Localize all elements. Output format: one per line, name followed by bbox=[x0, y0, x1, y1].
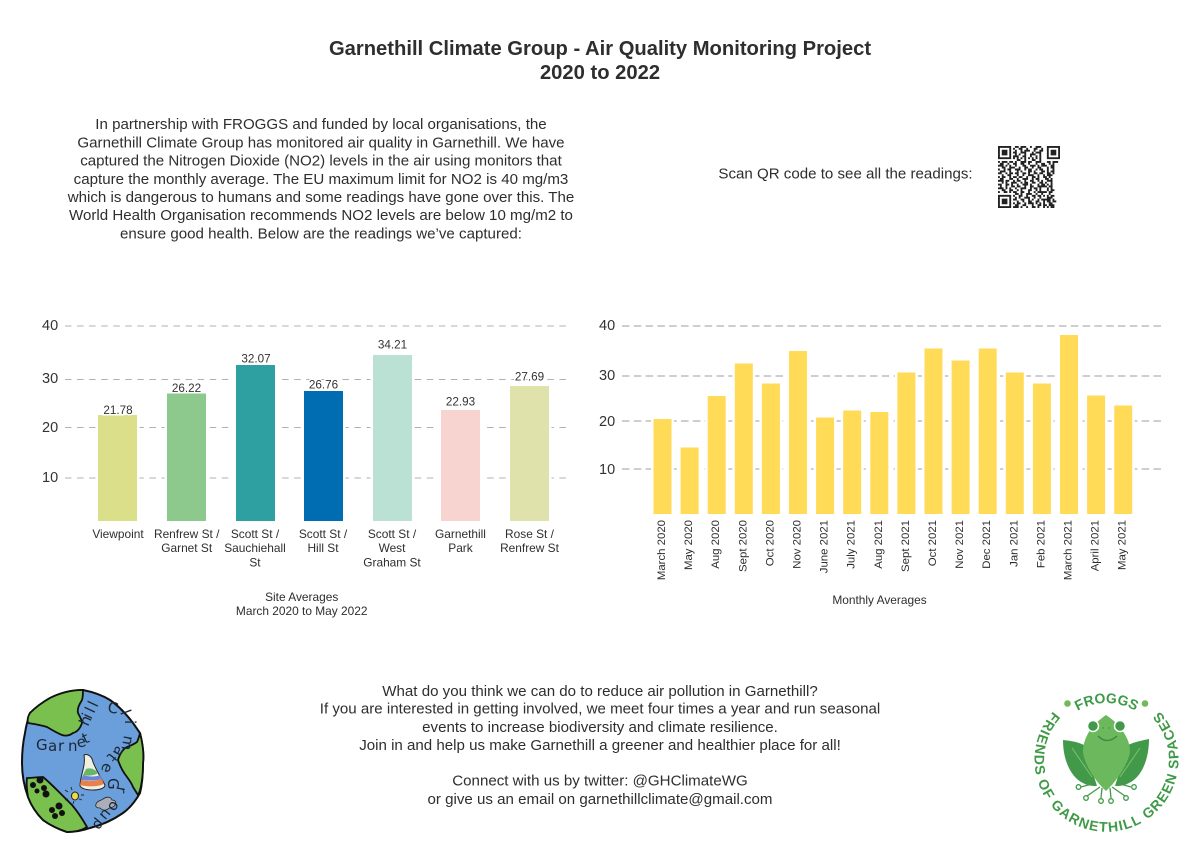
handwritten logo lettering bbox=[36, 698, 139, 834]
month labels: Sept 2021 bbox=[900, 520, 912, 572]
category labels: sites: Garnethill bbox=[435, 527, 486, 541]
QR code prompt: Scan QR code to see all the readings: bbox=[718, 166, 973, 182]
category labels: sites: Hill St bbox=[307, 541, 339, 555]
category labels: sites: Scott St / bbox=[231, 527, 280, 541]
bar values: site averages: 21.78 bbox=[103, 404, 133, 417]
category labels: sites: Renfrew St / bbox=[154, 527, 220, 541]
circular lettering: friends of garnethill green spaces: FRIENDS OF GARNETHILL GREEN SPACES bbox=[1034, 712, 1179, 832]
logo: Garnethill Climate Group globe bbox=[22, 690, 143, 834]
call to action text block: Join in and help us make Garnethill a greener and healthier place for all! bbox=[359, 737, 841, 754]
chart caption: monthly averages: Monthly Averages bbox=[832, 593, 927, 607]
category labels: sites: Sauchiehall bbox=[224, 541, 286, 555]
y axis labels: monthly averages: 30 bbox=[599, 368, 615, 384]
month labels: July 2021 bbox=[846, 520, 858, 569]
intro text block: ensure good health. Below are the readings we’ve captured: bbox=[120, 226, 522, 242]
category labels: sites bbox=[92, 527, 560, 570]
y axis labels: site averages: 10 bbox=[42, 470, 58, 486]
bar values: site averages: 27.69 bbox=[515, 370, 544, 384]
bar values: site averages: 26.22 bbox=[172, 382, 201, 395]
category labels: sites: Graham St bbox=[363, 556, 421, 570]
bar values: site averages: 22.93 bbox=[446, 396, 475, 408]
month labels bbox=[656, 520, 1129, 580]
category labels: sites: West bbox=[379, 541, 406, 555]
handwritten logo lettering: ClimateGroup bbox=[89, 698, 139, 834]
chart caption: site averages: Site Averages bbox=[265, 590, 338, 604]
call to action text block bbox=[320, 683, 880, 808]
frog bbox=[1063, 715, 1149, 803]
y axis labels: site averages: 30 bbox=[42, 371, 58, 387]
call to action text block: or give us an email on garnethillclimate@gmail.com bbox=[427, 791, 773, 808]
bar values: site averages: 34.21 bbox=[378, 338, 407, 352]
bars: monthly averages bbox=[654, 335, 1132, 514]
month labels: April 2021 bbox=[1090, 520, 1102, 571]
category labels: sites: Viewpoint bbox=[92, 527, 144, 541]
month labels: Aug 2021 bbox=[873, 520, 885, 569]
month labels: Aug 2020 bbox=[710, 520, 722, 569]
y axis labels: monthly averages: 40 bbox=[599, 318, 615, 334]
trees bbox=[30, 776, 65, 819]
month labels: March 2020 bbox=[656, 520, 668, 580]
month labels: June 2021 bbox=[819, 520, 831, 573]
intro text block: captured the Nitrogen Dioxide (NO2) levels in the air using monitors that bbox=[80, 152, 563, 170]
intro text block: World Health Organisation recommends NO2 levels are below 10 mg/m2 to bbox=[69, 207, 573, 224]
category labels: sites: Rose St / bbox=[505, 527, 555, 541]
month labels: Sept 2020 bbox=[737, 520, 749, 572]
month labels: May 2021 bbox=[1117, 520, 1129, 570]
call to action text block: What do you think we can do to reduce air pollution in Garnethill? bbox=[382, 683, 818, 700]
chart caption: site averages: March 2020 to May 2022 bbox=[236, 604, 368, 618]
land: right bbox=[118, 733, 143, 795]
category labels: sites: St bbox=[249, 556, 261, 570]
month labels: Dec 2021 bbox=[981, 520, 993, 569]
bars: site averages bbox=[98, 355, 549, 521]
circular lettering: FROGGS: FROGGS bbox=[1074, 693, 1138, 710]
bar chart: monthly averages bbox=[599, 318, 1161, 607]
intro text block: Garnethill Climate Group has monitored air quality in Garnethill. We have bbox=[77, 134, 565, 152]
y axis labels: monthly averages: 10 bbox=[599, 462, 615, 478]
land: top left bbox=[28, 690, 83, 736]
y axis labels: site averages: 20 bbox=[42, 420, 58, 436]
title bbox=[329, 38, 871, 84]
bar values: site averages: 26.76 bbox=[309, 378, 338, 392]
call to action text block: Connect with us by twitter: @GHClimateWG bbox=[452, 772, 748, 790]
month labels: Oct 2021 bbox=[927, 520, 939, 566]
month labels: Nov 2020 bbox=[792, 520, 804, 569]
handwritten logo lettering: Garnethill bbox=[36, 698, 102, 755]
logo: FROGGS bbox=[1034, 693, 1179, 832]
category labels: sites: Scott St / bbox=[299, 527, 348, 541]
month labels: March 2021 bbox=[1062, 520, 1074, 580]
month labels: Nov 2021 bbox=[954, 520, 966, 569]
month labels: Feb 2021 bbox=[1035, 520, 1047, 568]
rainbow cone bbox=[80, 754, 105, 790]
intro text block: capture the monthly average. The EU maximum limit for NO2 is 40 mg/m3 bbox=[74, 171, 568, 188]
category labels: sites: Garnet St bbox=[161, 541, 213, 555]
sun bbox=[65, 787, 84, 804]
month labels: Jan 2021 bbox=[1008, 520, 1020, 567]
bar chart: site averages bbox=[42, 318, 566, 618]
icon: QR code bbox=[998, 146, 1060, 208]
month labels: May 2020 bbox=[683, 520, 695, 570]
intro text block bbox=[67, 116, 574, 242]
y axis labels: monthly averages: 20 bbox=[599, 414, 615, 430]
category labels: sites: Renfrew St bbox=[500, 541, 560, 555]
land: bottom left bbox=[27, 777, 87, 832]
title: Garnethill Climate Group - Air Quality Monitoring Project bbox=[329, 38, 871, 60]
bar values: site averages: 32.07 bbox=[241, 352, 271, 366]
chart caption: site averages bbox=[236, 590, 368, 618]
category labels: sites: Scott St / bbox=[368, 527, 417, 541]
y axis labels: site averages bbox=[42, 318, 58, 486]
intro text block: which is dangerous to humans and some readings have gone over this. The bbox=[67, 189, 574, 206]
y axis labels: monthly averages bbox=[599, 318, 615, 478]
call to action text block: If you are interested in getting involved, we meet four times a year and run seasonal bbox=[320, 700, 880, 718]
title: 2020 to 2022 bbox=[540, 62, 660, 84]
call to action text block: events to increase biodiversity and climate resilience. bbox=[422, 719, 778, 736]
dots bbox=[1064, 700, 1148, 707]
category labels: sites: Park bbox=[448, 541, 473, 555]
y axis labels: site averages: 40 bbox=[42, 318, 58, 334]
intro text block: In partnership with FROGGS and funded by local organisations, the bbox=[95, 116, 547, 133]
bar values: site averages bbox=[103, 338, 544, 417]
month labels: Oct 2020 bbox=[764, 520, 776, 566]
globe ocean bbox=[22, 690, 143, 832]
cloud bbox=[96, 797, 116, 810]
